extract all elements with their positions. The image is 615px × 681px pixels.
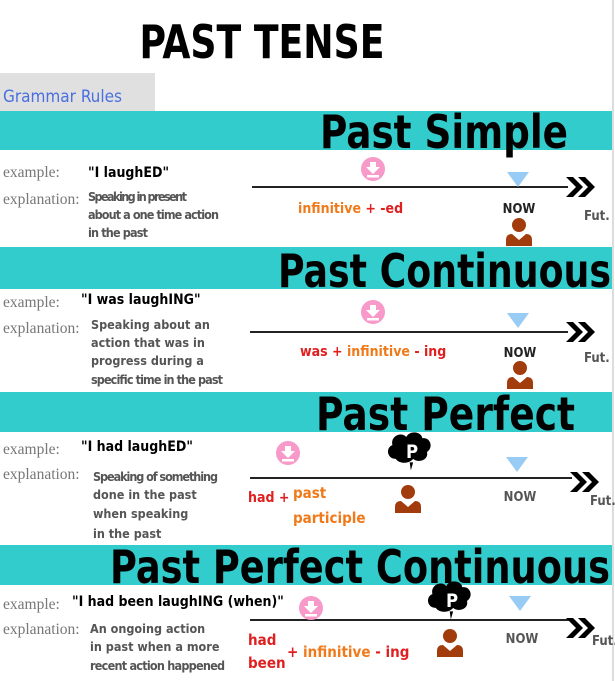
panel: past continuous: Fut. (584, 351, 610, 366)
panel: past simple: explanation: (3, 191, 80, 208)
panel: past simple: about a one time action (88, 207, 219, 222)
panel: past simple: in the past (88, 225, 149, 240)
panel: past perfect: example: (3, 441, 60, 458)
panel: past simple: Past Simple (320, 105, 568, 159)
panel: past perfect: when speaking (93, 506, 188, 521)
panel: past perfect continuous: recent action happened (90, 658, 225, 673)
panel: past perfect: NOW (504, 490, 536, 505)
panel: past continuous: example: (3, 294, 60, 311)
panel: past simple: example: (3, 164, 60, 181)
panel: past perfect continuous: had (248, 631, 276, 649)
grammar rules tab (0, 73, 155, 111)
panel: past perfect continuous (0, 540, 615, 673)
panel: past perfect: had + (248, 490, 289, 506)
panel: past perfect continuous: in past when a more (90, 639, 220, 654)
panel: past perfect (0, 387, 615, 541)
panel: past perfect continuous: NOW (506, 632, 538, 647)
panel: past continuous: "I was laughING" (81, 292, 201, 308)
panel: past simple: Fut. (584, 209, 610, 224)
panel: past perfect: "I had laughED" (81, 439, 193, 455)
panel: past continuous: progress during a (91, 353, 204, 368)
panel: past simple: "I laughED" (88, 165, 169, 181)
panel: past perfect: participle (293, 509, 366, 527)
panel: past perfect: Fut. (590, 494, 615, 509)
panel: past continuous: explanation: (3, 320, 80, 337)
panel: past perfect continuous: example: (3, 596, 60, 613)
panel: past perfect: in the past (93, 526, 162, 541)
panel: past continuous (0, 244, 612, 389)
panel: past simple: NOW (503, 202, 535, 217)
panel: past continuous: NOW (504, 346, 536, 361)
panel: past simple (0, 105, 612, 246)
panel: past perfect: Past Perfect (316, 387, 575, 441)
panel: past perfect: explanation: (3, 466, 80, 483)
panel: past simple: infinitive + -ed (298, 201, 403, 217)
panel: past perfect continuous: explanation: (3, 621, 80, 638)
panel: past perfect: Speaking of something (93, 469, 218, 484)
panel: past continuous: Speaking about an (91, 317, 210, 332)
panel: past continuous: specific time in the past (91, 372, 224, 387)
panel: past continuous: action that was in (91, 335, 205, 350)
panel: past perfect: done in the past (93, 487, 197, 502)
title: PAST TENSE (140, 15, 384, 69)
panel: past perfect continuous: An ongoing action (90, 621, 205, 636)
panel: past perfect continuous: + infinitive - ing (287, 643, 409, 661)
grammar rules tab: Grammar Rules (3, 87, 122, 107)
panel: past continuous: was + infinitive - ing (300, 344, 446, 360)
panel: past perfect continuous: "I had been laughING (when)" (72, 594, 284, 610)
panel: past perfect: past (293, 484, 327, 502)
panel: past perfect continuous: been (248, 654, 286, 672)
panel: past simple: Speaking in present (88, 189, 188, 204)
